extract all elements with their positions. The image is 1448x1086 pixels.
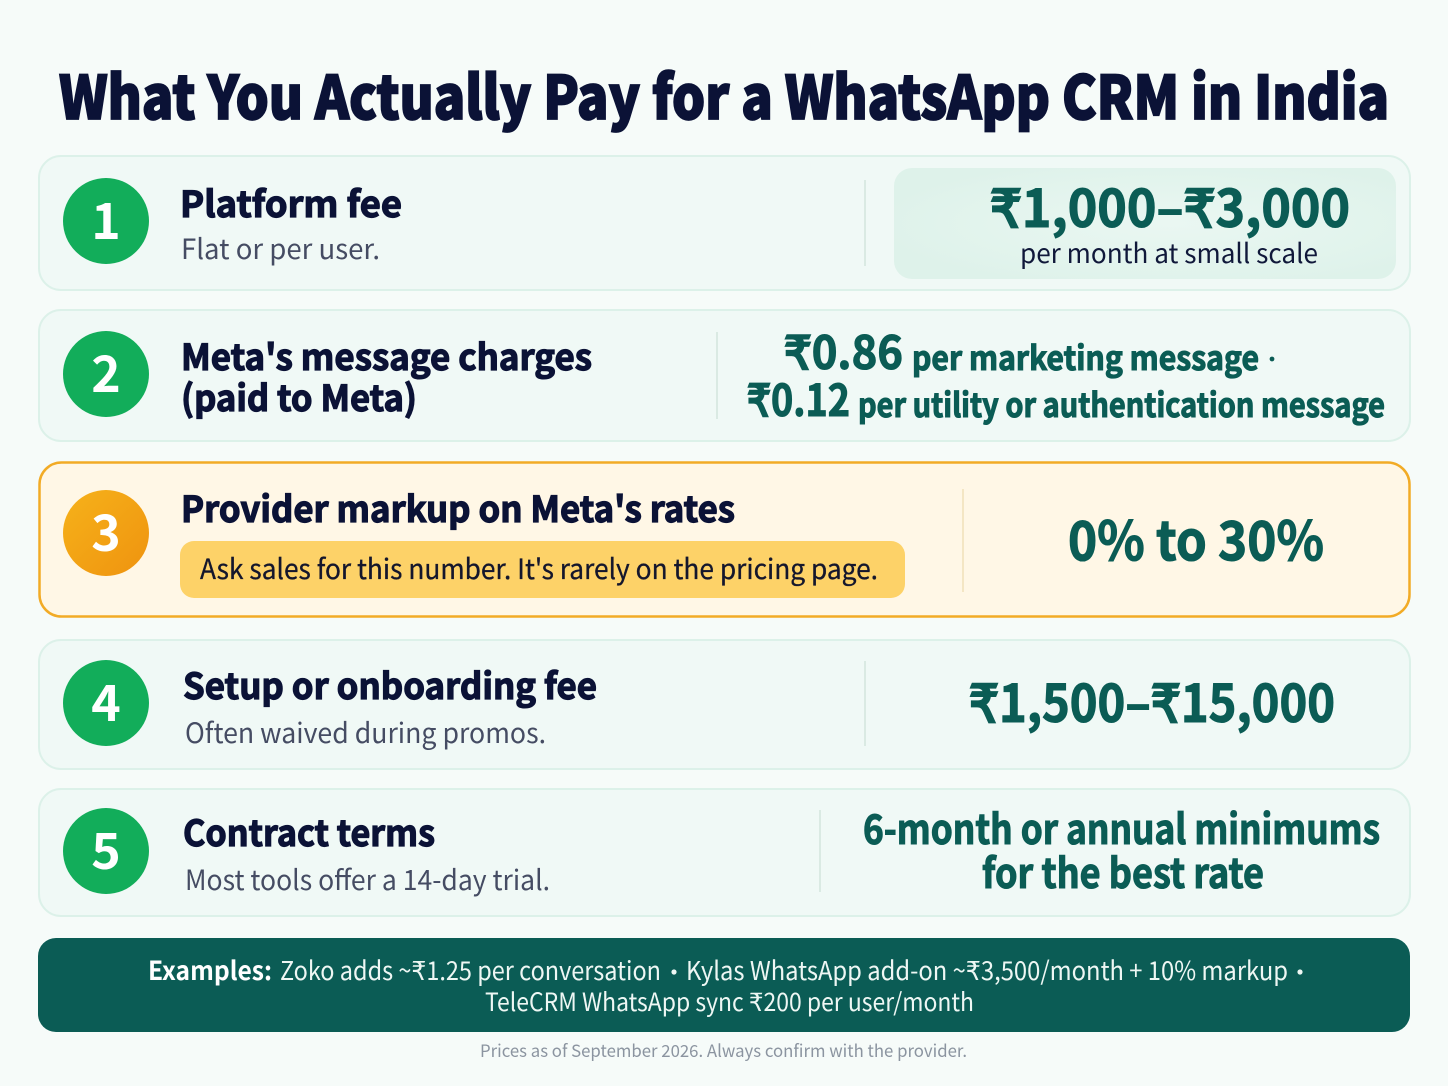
- heading: setup fee: Setup or onboarding fee: [183, 658, 597, 710]
- panel: provider markup: [40, 462, 1410, 616]
- value: message rates: per marketing message: [912, 332, 1259, 380]
- icon: number 1: [63, 178, 149, 264]
- text: often waived: Often waived during promos.: [185, 712, 546, 752]
- value: message rates: ₹0.86: [784, 317, 903, 383]
- icon: number 2: [63, 331, 149, 417]
- footer banner: examples: [38, 938, 1410, 1032]
- value: contract minimums: 6-month or annual minimums: [863, 796, 1380, 856]
- panel: contract terms: [39, 789, 1410, 916]
- text: flat or per user: Flat or per user.: [181, 228, 380, 268]
- value: message rates: ₹0.12: [747, 365, 850, 429]
- footer banner: examples: Zoko adds ~₹1.25 per conversation: [280, 951, 661, 988]
- value box: platform fee price: [894, 167, 1396, 279]
- panel: meta message charges: [39, 310, 1410, 441]
- text: trial: Most tools offer a 14-day trial.: [185, 859, 550, 899]
- footnote: Prices as of September 2026. Always confirm with the provider.: [480, 1037, 967, 1062]
- value box: platform fee price: per month at small scale: [1020, 232, 1318, 271]
- value: message rates: [747, 317, 1385, 429]
- icon: number 3: [63, 490, 149, 576]
- icon: number 5: 5: [91, 812, 121, 884]
- footer banner: examples: Examples:: [148, 951, 272, 988]
- icon: number 2: 2: [91, 335, 121, 407]
- heading: meta message charges: (paid to Meta): [181, 370, 417, 422]
- heading: meta message charges: [181, 329, 592, 422]
- footer banner: examples: Kylas WhatsApp add-on ~₹3,500/month + 10% markup: [686, 951, 1288, 988]
- icon: number 5: [63, 808, 149, 894]
- value: setup range: ₹1,500–₹15,000: [969, 662, 1335, 737]
- icon: number 1: 1: [91, 182, 121, 254]
- icon: number 3: 3: [91, 494, 121, 566]
- panel: setup fee: [39, 640, 1410, 769]
- value: markup range: 0% to 30%: [1068, 497, 1324, 576]
- value box: platform fee price: ₹1,000–₹3,000: [990, 167, 1350, 242]
- value: contract minimums: for the best rate: [982, 840, 1264, 900]
- heading: platform fee: Platform fee: [180, 176, 402, 228]
- icon: number 4: [63, 660, 149, 746]
- callout: ask sales: [180, 541, 905, 598]
- icon: number 4: 4: [91, 664, 121, 736]
- panel: platform fee: [39, 156, 1410, 290]
- heading: meta message charges: Meta's message charges: [181, 329, 592, 381]
- heading: contract terms: Contract terms: [183, 805, 435, 857]
- value: contract minimums: [863, 796, 1380, 900]
- footer banner: examples: TeleCRM WhatsApp sync ₹200 per user/month: [485, 983, 974, 1019]
- callout: ask sales: Ask sales for this number. It's rarely on the pricing page.: [200, 548, 878, 588]
- value: message rates: per utility or authentication message: [858, 379, 1385, 427]
- heading: provider markup: Provider markup on Meta's rates: [181, 481, 735, 533]
